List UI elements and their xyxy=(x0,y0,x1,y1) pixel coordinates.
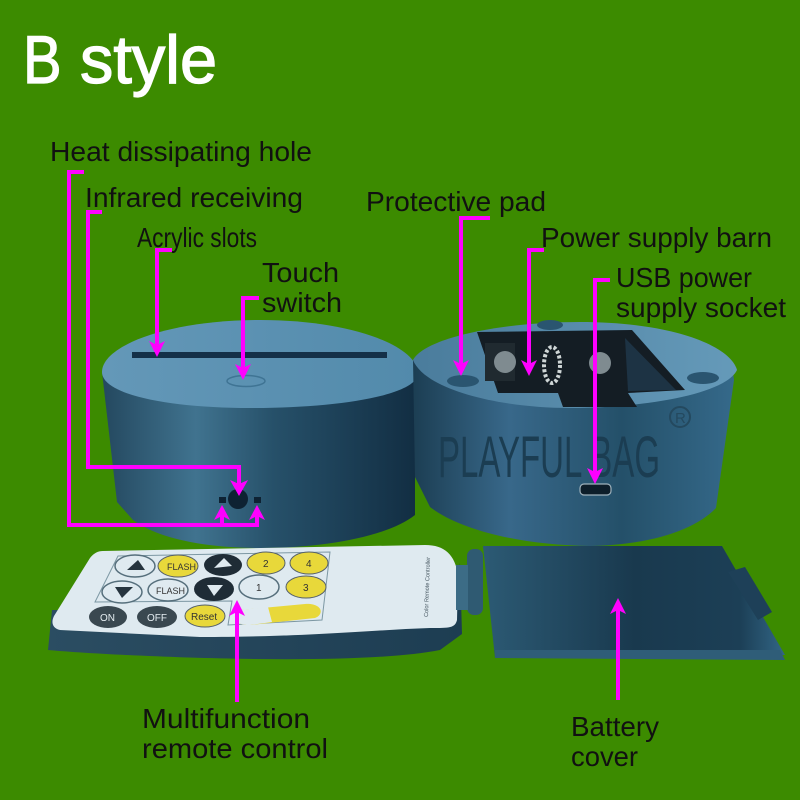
hinge link xyxy=(456,565,468,610)
arrow: power supply barn xyxy=(521,250,544,376)
protective pad right xyxy=(687,372,719,384)
button 4: 4 xyxy=(306,559,312,570)
battery holder left xyxy=(485,343,515,381)
label: power supply barn: Power supply barn xyxy=(541,222,772,253)
arrow: touch switch xyxy=(235,298,259,380)
touch switch ring xyxy=(227,376,265,386)
protective pad left xyxy=(447,375,479,387)
base top surface xyxy=(102,320,418,408)
cover front edge xyxy=(495,650,785,660)
label: heat dissipating hole: Heat dissipating hole xyxy=(50,136,312,167)
label: battery cover: cover xyxy=(571,741,638,772)
infrared receiver xyxy=(228,489,248,509)
arrow: heat dissipating hole xyxy=(69,172,265,525)
label: multifunction remote control: remote control xyxy=(142,733,328,764)
button 2 xyxy=(247,552,285,574)
label: usb power supply socket: USB power xyxy=(616,262,752,293)
button off: OFF xyxy=(147,613,167,624)
battery compartment xyxy=(477,330,685,407)
cover plate xyxy=(483,546,785,658)
button on xyxy=(89,606,127,628)
base top surface xyxy=(413,322,737,408)
label: touch switch xyxy=(262,257,342,318)
label: acrylic slots: Acrylic slots xyxy=(137,222,257,253)
left lamp base xyxy=(102,320,418,548)
heat holes xyxy=(219,497,226,503)
button flash white: FLASH xyxy=(156,586,185,596)
button minus xyxy=(194,577,234,601)
arrow: remote control xyxy=(229,600,245,702)
remote edge xyxy=(48,563,462,659)
label: touch switch: switch xyxy=(262,287,342,318)
label: battery cover xyxy=(571,711,659,772)
button 4 xyxy=(290,552,328,574)
protective pad top xyxy=(537,320,563,330)
registered mark: R xyxy=(675,410,686,427)
metal contact right xyxy=(589,352,611,374)
button 3 xyxy=(286,576,326,598)
title: B xyxy=(23,23,62,98)
button outlines xyxy=(95,552,330,625)
battery cover xyxy=(456,546,785,660)
label: protective pad: Protective pad xyxy=(366,186,546,217)
base body xyxy=(102,372,415,548)
button 3: 3 xyxy=(303,583,309,594)
remote control xyxy=(48,545,462,659)
button flash yellow xyxy=(158,555,198,577)
button off xyxy=(137,606,177,628)
remote face xyxy=(52,545,458,637)
label: usb power supply socket xyxy=(616,262,786,323)
button 2: 2 xyxy=(263,559,269,570)
button arrow down xyxy=(102,581,142,603)
usb socket xyxy=(580,484,611,495)
button plus xyxy=(204,554,242,576)
label: battery cover: Battery xyxy=(571,711,659,742)
title: style xyxy=(80,22,217,98)
arrow: protective pad xyxy=(453,218,490,376)
button reset xyxy=(185,605,225,627)
compartment inner right xyxy=(625,338,676,391)
arrow: usb power supply socket xyxy=(587,280,610,484)
base body xyxy=(413,360,734,546)
button flash white xyxy=(148,579,188,601)
button on: ON xyxy=(100,613,115,624)
spring xyxy=(544,347,560,383)
arrow: infrared receiving xyxy=(88,212,248,496)
arrow: acrylic slots xyxy=(149,250,172,357)
hinge xyxy=(467,549,483,615)
label: infrared receiving: Infrared receiving xyxy=(85,182,303,213)
acrylic slot xyxy=(132,352,387,358)
button flash yellow: FLASH xyxy=(167,562,196,572)
arrow: battery cover xyxy=(610,598,626,700)
cover clip xyxy=(728,567,772,620)
button arrow up xyxy=(115,555,155,577)
button 1 xyxy=(239,575,279,599)
registered mark xyxy=(670,407,690,427)
right lamp base xyxy=(413,320,737,546)
button reset: Reset xyxy=(191,612,217,623)
label: multifunction remote control: Multifunction xyxy=(142,703,310,734)
button long arrows xyxy=(235,604,321,625)
heat hole right xyxy=(254,497,261,503)
label: touch switch: Touch xyxy=(262,257,339,288)
metal contact left xyxy=(494,351,516,373)
button 1: 1 xyxy=(256,583,262,594)
remote brand text: Color Remote Controller xyxy=(424,557,432,617)
label: usb power supply socket: supply socket xyxy=(616,292,786,323)
label: multifunction remote control xyxy=(142,703,328,764)
